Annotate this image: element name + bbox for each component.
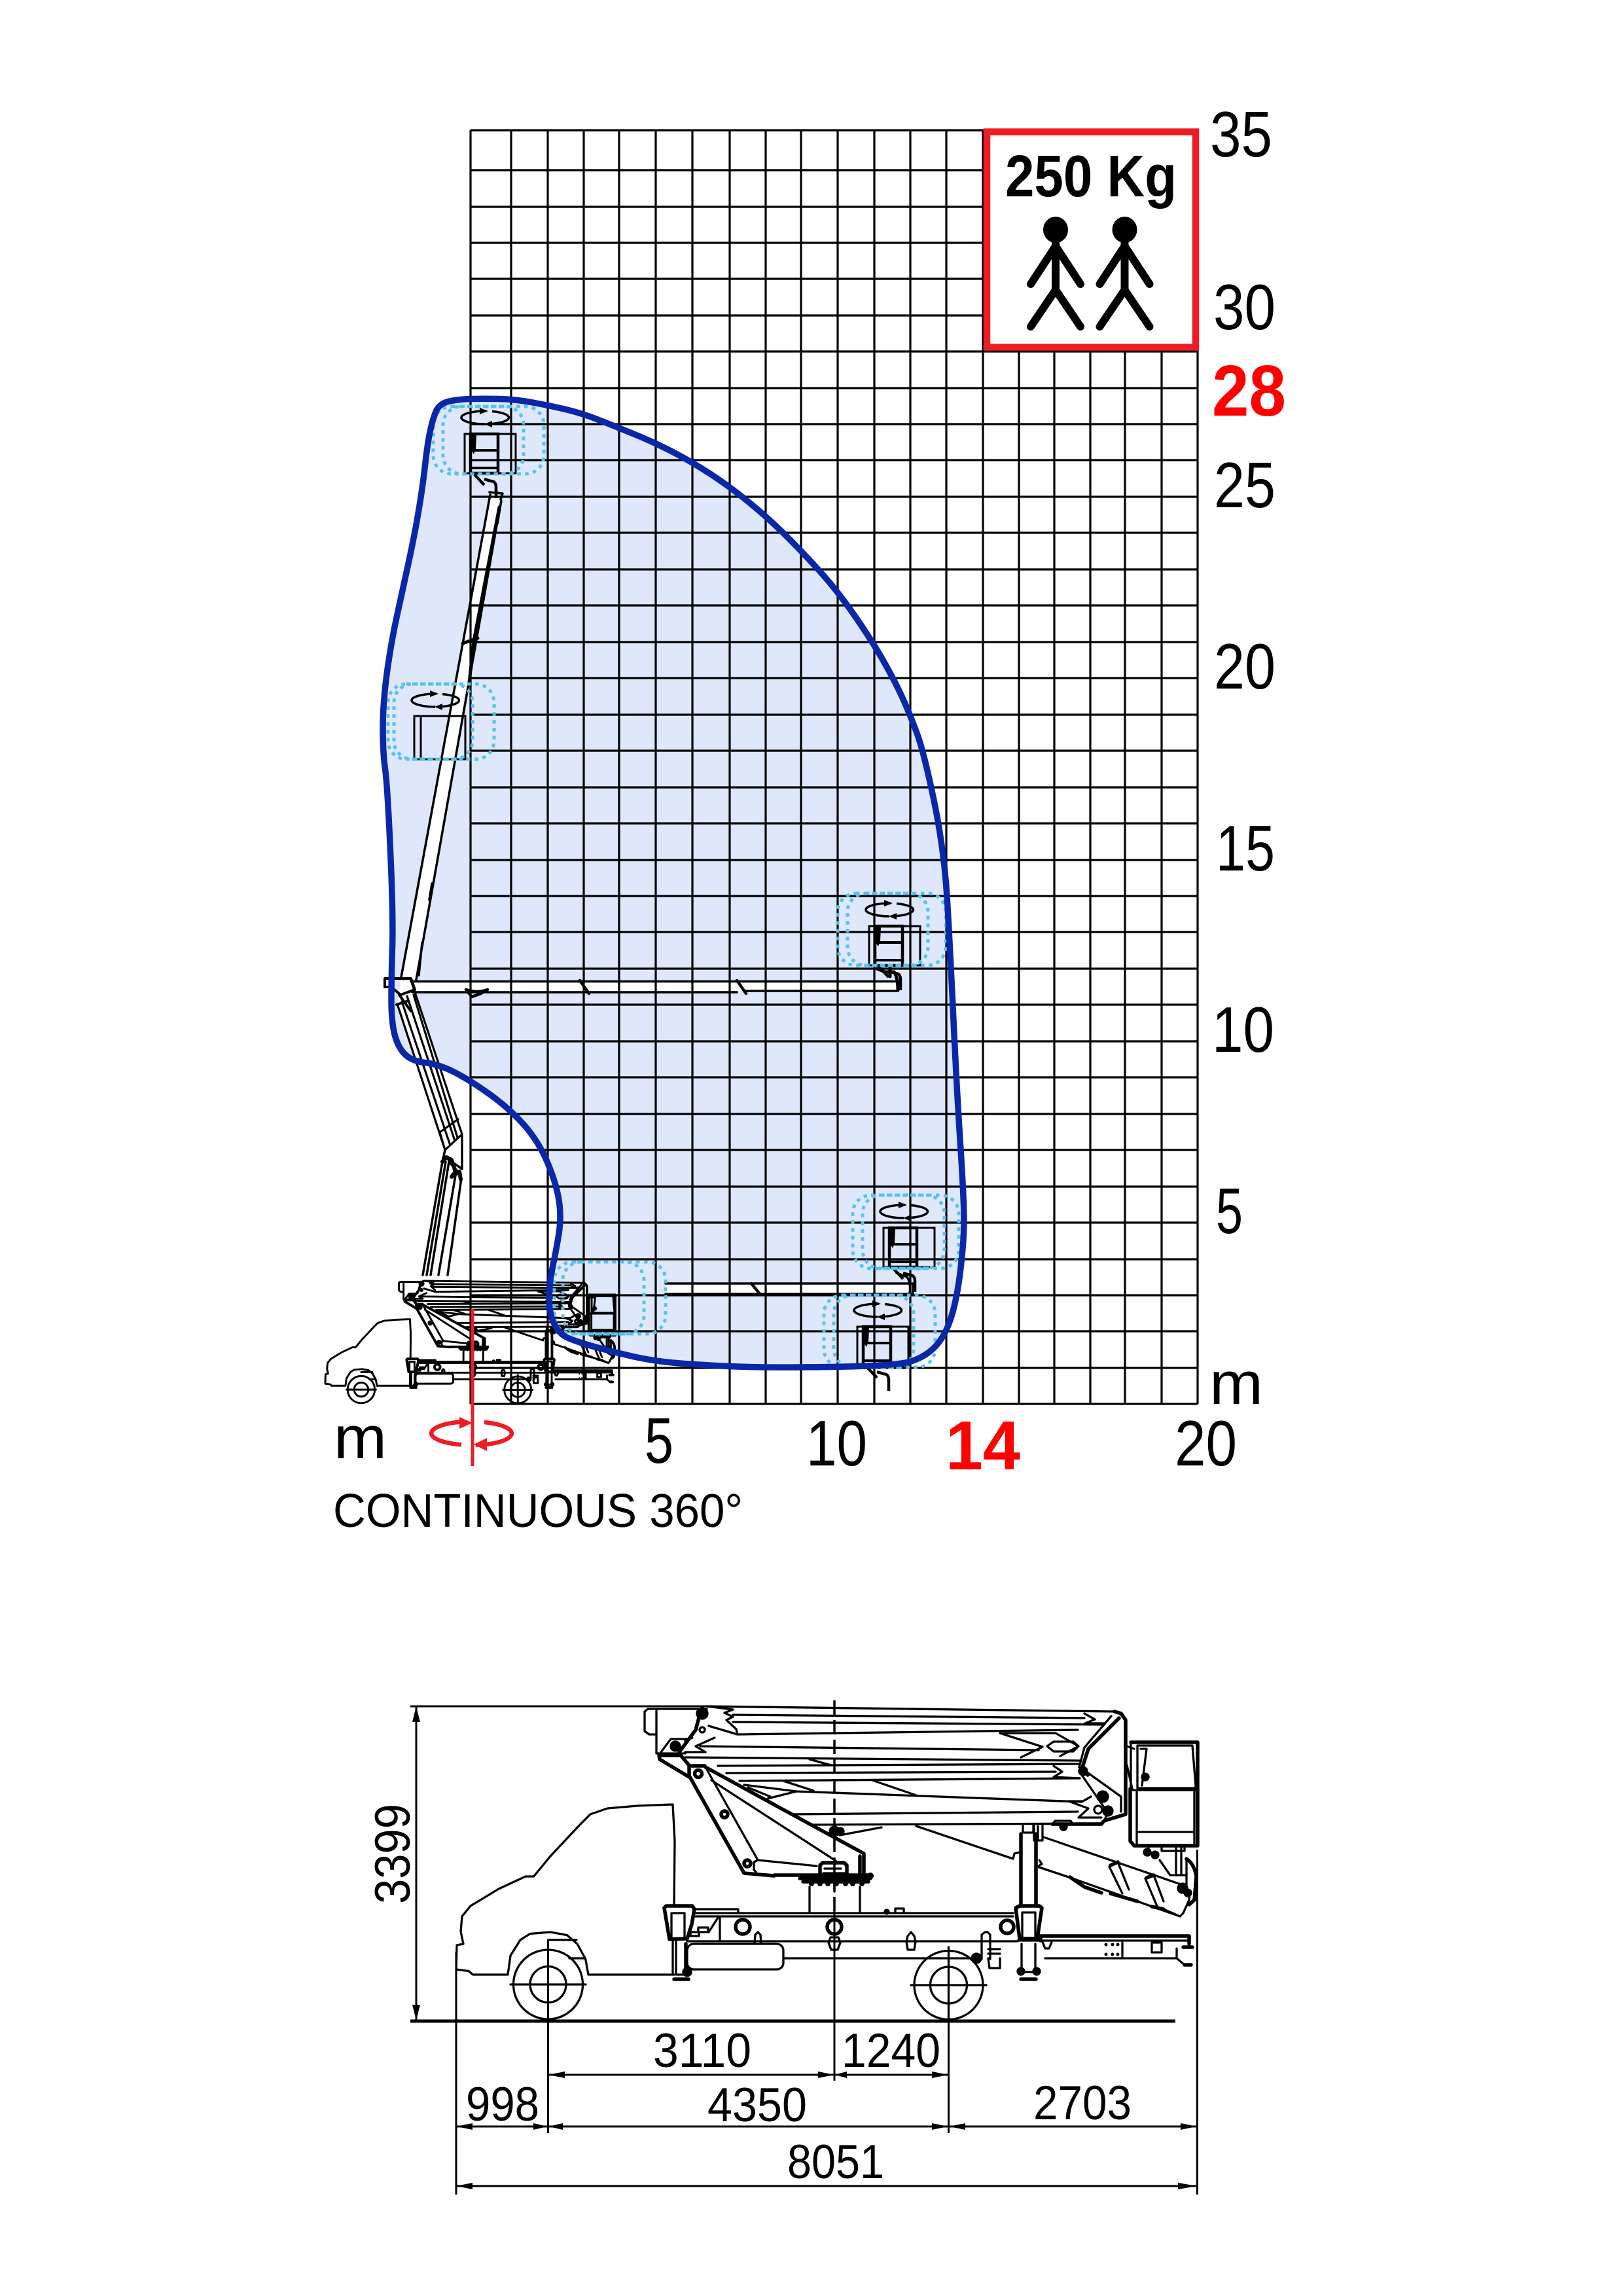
basket [1130,1742,1198,1846]
dimension values: 3110 [653,2024,751,2077]
rotation caption: CONTINUOUS 360° [333,1485,743,1537]
dimension values: 4350 [707,2079,807,2132]
platform position top [461,408,516,498]
platform position lowest [854,1300,908,1391]
dimension values: 1240 [842,2024,940,2077]
knee joint pins [442,1157,461,1179]
dimension lines [410,1706,1198,2195]
rotation axis and icon [431,1309,512,1466]
boom braces [1109,1862,1164,1909]
extended boom positions [385,492,913,1295]
reach axis labels: 20 [1175,1407,1237,1479]
cab outline [456,1804,675,1975]
boom end clevis [877,967,898,990]
fuel tank [687,1944,783,1969]
articulated lower arm [423,1134,462,1275]
turret [810,1872,860,1912]
working envelope fill [383,399,964,1367]
height axis labels: 15 [1216,812,1275,884]
height axis labels: 10 [1212,994,1274,1066]
overall height value: 3399 [365,1804,421,1904]
upper joint pin block [385,978,415,1011]
height axis labels: 5 [1216,1175,1243,1247]
horizontal telescopic boom [411,982,898,992]
height axis labels: 25 [1214,449,1275,521]
dotted platform rotation zones [388,406,959,1367]
upper boom thick edge and clamp [463,507,499,683]
rear frame bolts [1105,1943,1119,1956]
grid [471,130,1198,1404]
chassis [687,1913,1177,1958]
reach axis labels: m [334,1405,387,1471]
small stowed truck on chart [325,1281,615,1404]
boom bundle [685,1706,1115,1835]
reach axis labels: 10 [806,1407,867,1479]
reach axis labels: 14 [946,1407,1020,1484]
capacity text: 250 Kg [1005,144,1177,209]
boom zigzag ends [1000,1713,1104,1818]
side elevation truck [456,1706,1198,2021]
dimension arrows [412,1706,1197,2189]
platform position far left [412,691,465,759]
icon: two persons [1031,217,1149,327]
boom head [1052,1712,1126,1824]
reach axis labels: 5 [645,1405,673,1477]
basket support [1149,1846,1186,1875]
chassis details [736,1920,750,1934]
height axis labels: 28 [1212,351,1286,431]
height axis labels: m [1209,1350,1263,1417]
dimension values: 998 [466,2078,539,2131]
load capacity box [987,132,1196,347]
height axis labels: 35 [1210,98,1272,170]
boom markers [466,980,760,1295]
platform position low right [880,1202,935,1292]
dimension values: 8051 [787,2136,884,2189]
lift cylinder [1021,1834,1036,1906]
articulated upper arm [398,980,462,1150]
rear frame [1041,1936,1189,1944]
left boom end [645,1709,707,1753]
boom pivot axis dashed [833,1700,836,1912]
platform position mid right [866,900,920,990]
height axis labels [1209,98,1286,1417]
rear outrigger [1016,1906,1042,1939]
rear wheel [914,1950,983,2020]
low horizontal boom [666,1273,913,1294]
reach axis labels [334,1405,1237,1484]
lower boom section [916,1826,1190,1916]
working envelope outline [383,399,964,1367]
front outrigger [664,1906,694,1939]
height axis labels: 30 [1213,271,1275,343]
upper telescopic boom [401,492,503,980]
boom white interiors [397,495,913,1330]
dimension values: 2703 [1033,2077,1132,2130]
lower arm [689,1766,864,1876]
front wheel [513,1950,582,2019]
height axis labels: 20 [1214,630,1275,702]
dimension values [466,2024,1132,2189]
